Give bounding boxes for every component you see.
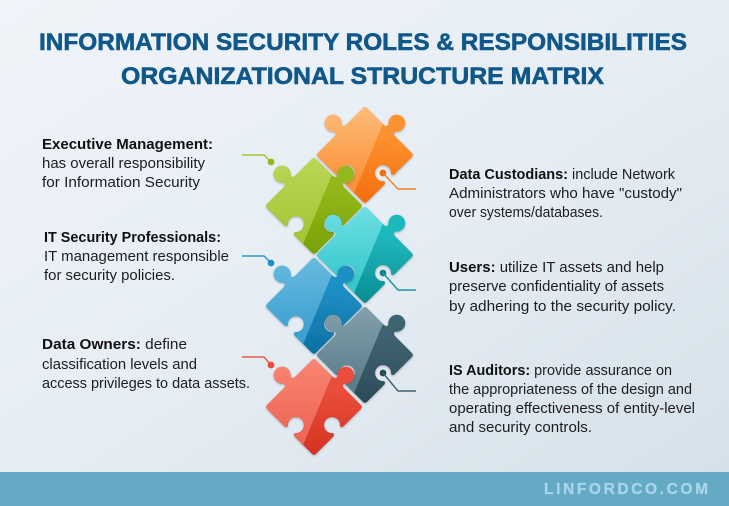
text: data custodians: Administrators who have "custody" xyxy=(449,186,682,202)
text: data custodians xyxy=(449,167,682,221)
text: executive management: Executive Management: xyxy=(42,137,213,153)
text: users: preserve confidentiality of assets xyxy=(449,279,664,295)
footer bar xyxy=(0,472,729,506)
connector: data owners xyxy=(242,357,274,368)
text: is auditors: the appropriateness of the design and xyxy=(449,382,692,398)
title: INFORMATION SECURITY ROLES & RESPONSIBILITIES xyxy=(39,29,687,56)
text: data owners: access privileges to data assets. xyxy=(42,376,250,392)
text: data owners: Data Owners: define xyxy=(42,337,187,353)
text: is auditors: and security controls. xyxy=(449,420,592,436)
text: it security professionals xyxy=(44,230,229,284)
text: executive management: has overall responsibility xyxy=(42,156,206,172)
puzzle piece: red xyxy=(265,359,363,457)
connector: is auditors xyxy=(380,370,416,391)
text: data custodians: over systems/databases. xyxy=(449,205,603,221)
connector: users xyxy=(380,270,416,290)
text: it security professionals: for security policies. xyxy=(44,268,175,284)
text: is auditors: IS Auditors: provide assurance on xyxy=(449,363,672,379)
connector: it security professionals xyxy=(242,256,274,266)
text: it security professionals: IT management responsible xyxy=(44,249,229,265)
puzzle piece: slate xyxy=(316,307,414,405)
text: users: Users: utilize IT assets and help xyxy=(449,260,664,276)
connector: data custodians xyxy=(380,170,416,189)
puzzle piece: blue xyxy=(265,258,363,356)
text: executive management xyxy=(42,137,213,191)
puzzle piece: teal xyxy=(316,207,414,305)
text: is auditors: operating effectiveness of entity-level xyxy=(449,401,695,417)
puzzle piece: orange xyxy=(316,107,414,205)
title: ORGANIZATIONAL STRUCTURE MATRIX xyxy=(121,63,605,90)
text: executive management: for Information Security xyxy=(42,175,201,191)
text: is auditors xyxy=(449,363,695,436)
connector: executive management xyxy=(242,155,274,165)
text: data owners xyxy=(42,337,250,392)
text: users xyxy=(449,260,676,315)
text: data custodians: Data Custodians: include Network xyxy=(449,167,676,183)
text: users: by adhering to the security policy. xyxy=(449,299,676,315)
footer brand: LINFORDCO.COM xyxy=(544,481,708,498)
title xyxy=(39,29,687,90)
text: data owners: classification levels and xyxy=(42,357,197,373)
puzzle matrix xyxy=(265,107,414,457)
puzzle piece: green xyxy=(265,158,363,256)
text: it security professionals: IT Security Professionals: xyxy=(44,230,221,246)
